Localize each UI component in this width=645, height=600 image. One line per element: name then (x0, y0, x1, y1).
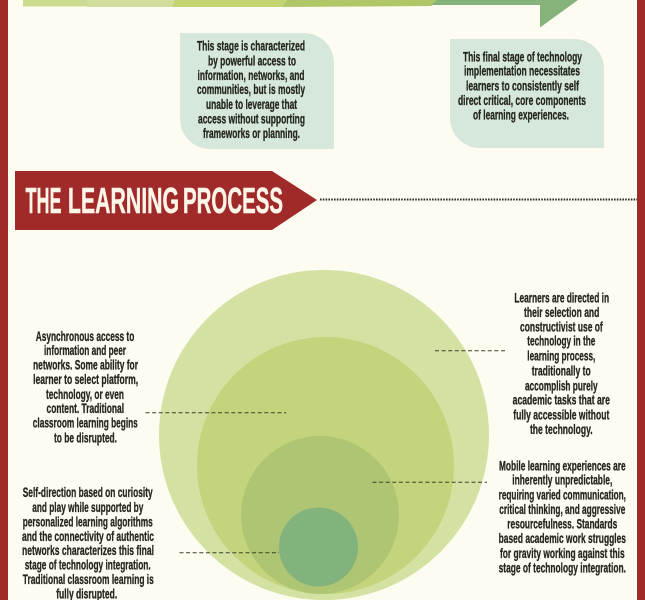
text block: self-direction: and the connectivity of authentic (22, 529, 154, 544)
section heading banner: LEARNING (68, 180, 179, 221)
section heading banner (15, 171, 317, 230)
callout: final stage: implementation necessitates (464, 64, 580, 78)
nested circles chart (159, 270, 489, 600)
section heading banner: PROCESS (183, 180, 283, 221)
text block: self-direction: personalized learning algorithms (23, 514, 153, 530)
text block: learners directed: traditionally to (532, 364, 591, 378)
text block: asynchronous access: networks. Some ability for (33, 358, 138, 372)
leader line: learners directed (435, 350, 505, 352)
text block: self-direction: Self-direction based on curiosity (23, 485, 153, 500)
callout: final stage: of learning experiences. (473, 108, 569, 122)
leader line: mobile learning (372, 481, 487, 483)
top stage arrow (23, 0, 578, 28)
red side border left (0, 0, 8, 600)
text block: self-direction: stage of technology integration. (25, 558, 151, 572)
text block: self-direction (22, 485, 154, 600)
callout: final stage (450, 39, 604, 148)
dotted divider (320, 198, 637, 200)
callout: powerful access stage: communities, but is mostly (197, 82, 305, 97)
callout: powerful access stage: This stage is characterized (197, 38, 305, 54)
text block: asynchronous access: information and peer (44, 343, 126, 358)
section heading banner: THE (26, 180, 62, 221)
text block: asynchronous access: to be disrupted. (54, 430, 117, 446)
text block: asynchronous access: Asynchronous access to (36, 329, 134, 344)
red side border right (637, 0, 645, 600)
leader line: asynchronous (146, 412, 286, 414)
text block: self-direction: Traditional classroom learning is (23, 572, 154, 587)
text block: learners directed: learning process, (527, 348, 595, 364)
leader line: self-direction (180, 552, 279, 554)
text block: self-direction: and play while supported by (32, 500, 144, 515)
callout: powerful access stage: by powerful access to (208, 54, 296, 68)
text block: learners directed: accomplish purely (525, 378, 598, 394)
callout: powerful access stage: frameworks or planning. (203, 126, 300, 141)
text block: learners directed: technology in the (527, 334, 596, 348)
callout: powerful access stage (180, 33, 334, 149)
text block: asynchronous access: technology, or even (46, 387, 124, 402)
text block: asynchronous access (33, 329, 138, 446)
text block: asynchronous access: classroom learning begins (33, 416, 138, 430)
text block: asynchronous access: learner to select platform, (33, 372, 138, 387)
text block: learners directed (513, 290, 610, 437)
text block: mobile learning (499, 458, 626, 576)
text block: self-direction: networks characterizes this final (22, 543, 154, 558)
text block: asynchronous access: content. Traditional (47, 401, 124, 416)
text block: learners directed: their selection and (524, 305, 599, 320)
callout: powerful access stage: unable to leverage that (206, 97, 297, 112)
callout: final stage: learners to consistently self (466, 78, 579, 94)
callout: powerful access stage: information, networks, and (198, 68, 304, 83)
text block: learners directed: the technology. (530, 422, 593, 437)
callout: powerful access stage: access without supporting (198, 112, 305, 126)
